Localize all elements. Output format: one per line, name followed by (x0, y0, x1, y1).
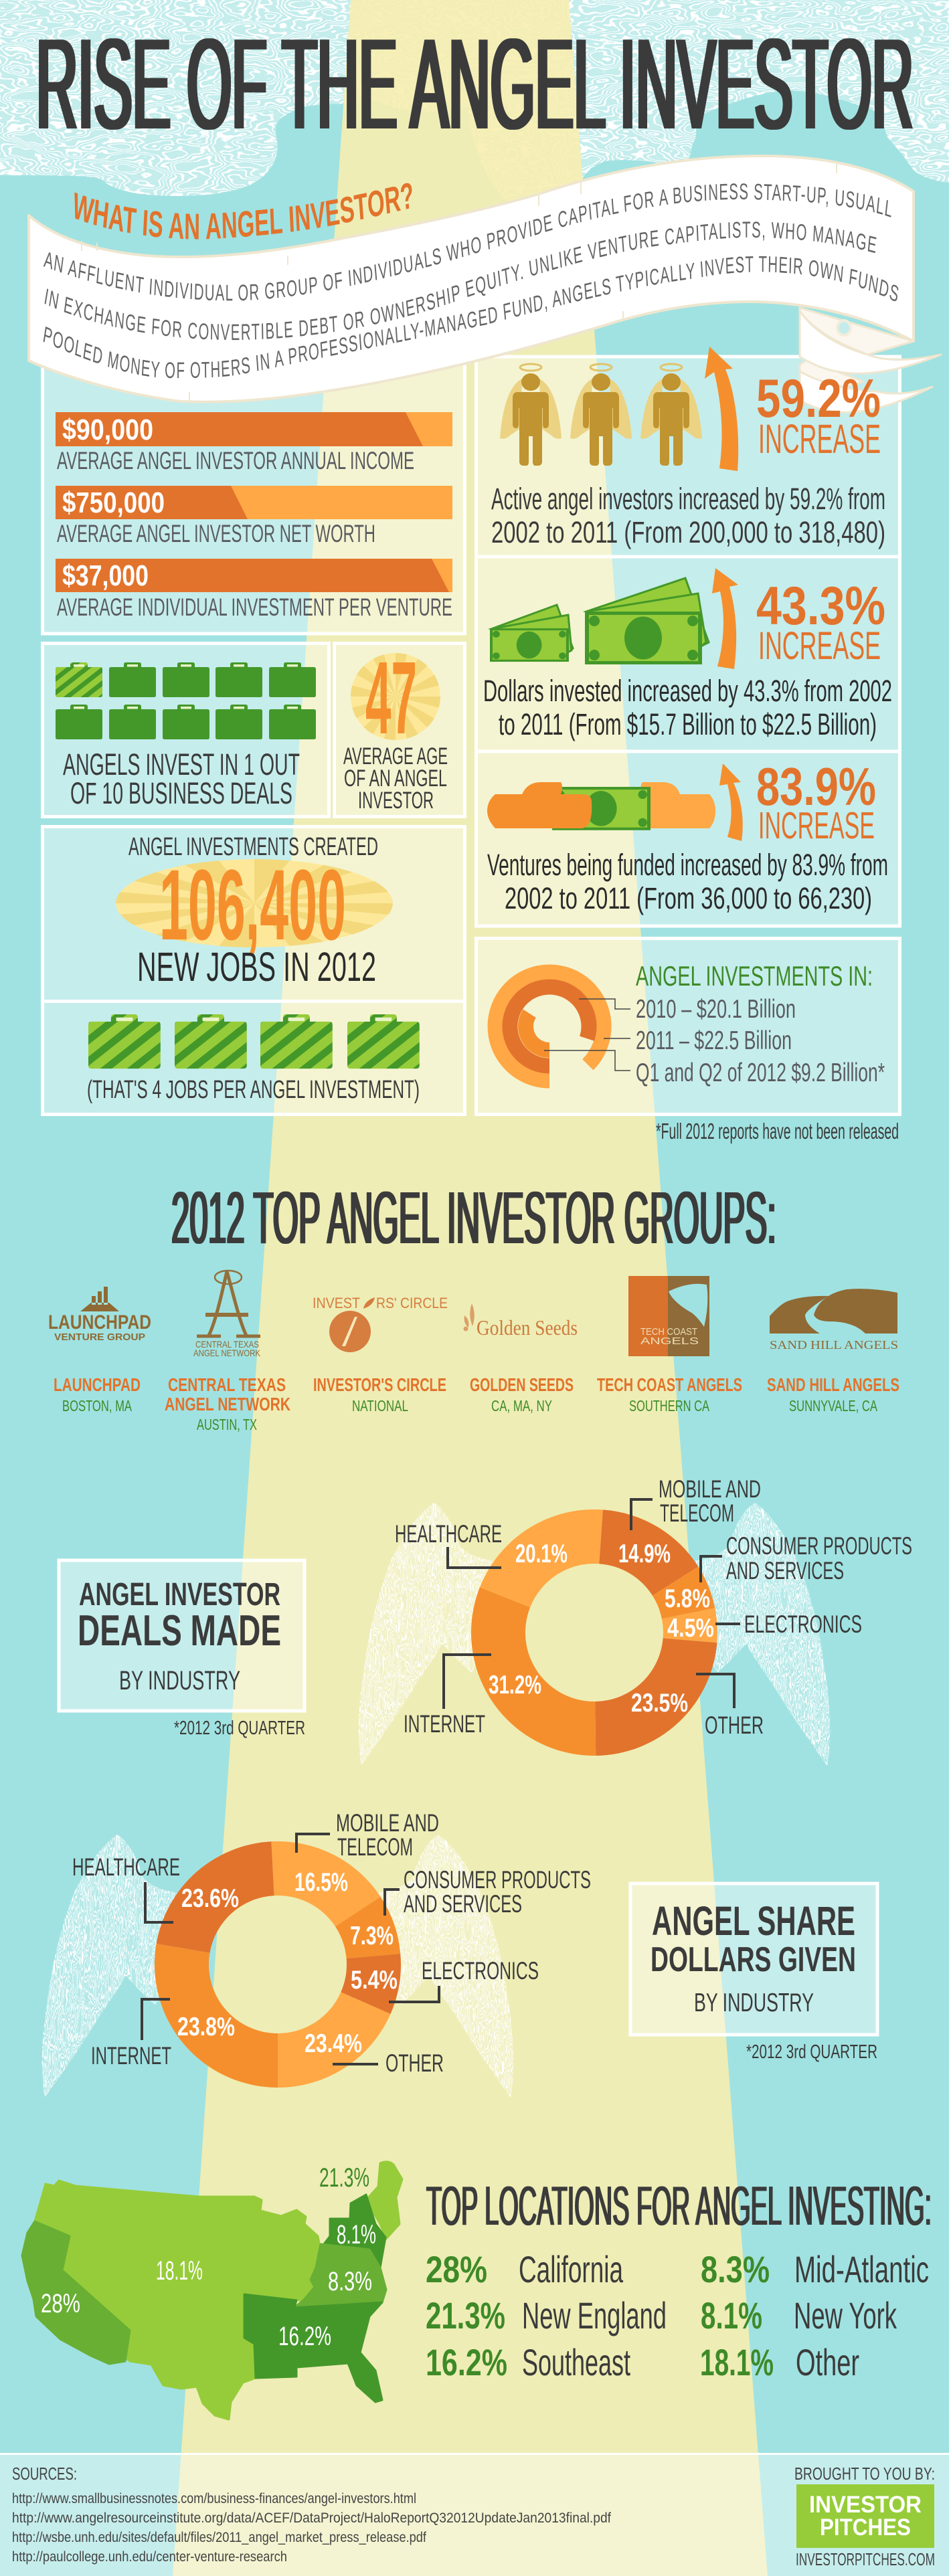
golden seeds (470, 1374, 574, 1414)
icon: hands exchanging money (487, 782, 715, 830)
ribbon banner (29, 156, 914, 402)
bar: per venture (56, 559, 452, 592)
slice values (489, 1540, 714, 1718)
arrow (712, 568, 738, 669)
icon: sunburst 47 (346, 640, 445, 755)
slice values: 23.6% (181, 1884, 239, 1913)
text: ventures funded (487, 848, 888, 915)
title text: BY INDUSTRY (119, 1666, 240, 1695)
panel: ventures funded (477, 751, 899, 926)
logo: investors' circle: INVEST (313, 1295, 360, 1311)
title text: ANGEL SHARE (652, 1898, 855, 1944)
region: california (22, 2221, 130, 2364)
golden seeds: CA, MA, NY (491, 1397, 552, 1414)
category labels donut 2: CONSUMER PRODUCTS (404, 1866, 591, 1894)
slice values: 14.9% (618, 1540, 671, 1568)
slice values: 31.2% (489, 1671, 541, 1699)
category labels donut 1: MOBILE AND (659, 1475, 761, 1503)
logo: sand hill angels: SAND HILL ANGELS (770, 1338, 898, 1352)
region: southeast (244, 2294, 382, 2402)
footer panel (0, 2453, 949, 2576)
bar: net worth: $750,000 (62, 486, 165, 519)
category labels donut 1: HEALTHCARE (395, 1520, 502, 1548)
category labels donut 2 (72, 1809, 591, 2077)
text: average age: OF AN ANGEL (344, 765, 447, 792)
tech coast: SOUTHERN CA (629, 1397, 709, 1414)
location percentages: 21.3% (426, 2294, 505, 2336)
footnote: *2012 3rd QUARTER (174, 1718, 305, 1739)
investors circle: INVESTOR'S CIRCLE (313, 1374, 446, 1395)
panel: average age (335, 640, 464, 816)
category labels donut 1: INTERNET (404, 1710, 485, 1738)
bar: per venture: $37,000 (62, 559, 149, 592)
category labels donut 2: ELECTRONICS (422, 1957, 539, 1985)
tech coast (597, 1374, 742, 1414)
sources: http://www.angelresourceinstitute.org/data/ACEF/DataProject/HaloReportQ32012UpdateJan2013final.pdf (12, 2510, 611, 2526)
leader lines (544, 999, 630, 1071)
region: new england (366, 2162, 402, 2239)
map labels: 8.1% (337, 2220, 376, 2249)
sand hill (767, 1374, 899, 1414)
category labels donut 1: ELECTRONICS (744, 1611, 862, 1638)
title text: ANGEL INVESTOR (79, 1577, 280, 1613)
icon: banknotes (490, 578, 709, 664)
region: mid-atlantic (294, 2244, 386, 2308)
leader lines donut 2 (142, 1834, 439, 2064)
sources: http://wsbe.unh.edu/sites/default/files/2011_angel_market_press_release.pdf (12, 2530, 426, 2545)
central texas: ANGEL NETWORK (165, 1394, 290, 1414)
text: active investors (491, 482, 885, 549)
leader lines donut 1 (444, 1499, 740, 1709)
map of the united states (22, 2162, 402, 2419)
donut chart: deals made (471, 1509, 717, 1756)
sunburst number: 106,400 (159, 848, 346, 961)
slice values: 5.4% (351, 1966, 398, 1995)
sources (12, 2464, 611, 2565)
map labels: 28% (41, 2289, 80, 2318)
label: net worth: AVERAGE ANGEL INVESTOR NET WORTH (57, 520, 375, 547)
text: created: ANGEL INVESTMENTS CREATED (128, 833, 378, 861)
logo: sand hill angels (770, 1289, 898, 1352)
panel: income stats (43, 361, 464, 634)
location names: Southeast (522, 2341, 630, 2383)
location percentages (426, 2248, 774, 2383)
launchpad: BOSTON, MA (62, 1397, 132, 1414)
map labels (41, 2163, 376, 2351)
sources: http://www.smallbusinessnotes.com/business-finances/angel-investors.html (12, 2491, 416, 2506)
bar: annual income (56, 412, 452, 446)
banner text (43, 183, 898, 379)
icon: three angels (500, 364, 702, 466)
logo: investor pitches: PITCHES (820, 2514, 911, 2541)
spotlight beam (173, 0, 768, 2576)
arrow (719, 763, 743, 841)
investors circle: NATIONAL (352, 1397, 408, 1414)
logo: launchpad (48, 1287, 151, 1343)
title text: BY INDUSTRY (694, 1989, 814, 2017)
wings behind donut 1 (348, 1492, 843, 1773)
group names and locations (54, 1374, 899, 1433)
tech coast: TECH COAST ANGELS (597, 1374, 742, 1395)
banner text: IN EXCHANGE FOR CONVERTIBLE DEBT OR OWNERSHIP EQUITY. UNLIKE VENTURE CAPITALISTS, WHO MANAGE (44, 221, 877, 340)
stat: 43.3% increase: 43.3% (756, 576, 885, 636)
sand hill: SUNNYVALE, CA (789, 1397, 877, 1414)
panel: deals made title (59, 1560, 305, 1711)
central texas (165, 1374, 290, 1433)
sources: SOURCES: (12, 2464, 77, 2484)
ribbon tail (800, 308, 941, 412)
stat: 59.2% increase (756, 369, 881, 462)
location names: California (519, 2248, 624, 2290)
text: average age: INVESTOR (358, 788, 434, 814)
region: other (35, 2181, 321, 2419)
slice values: 20.1% (515, 1540, 568, 1568)
category labels donut 2: INTERNET (91, 2042, 171, 2069)
slice values: 23.4% (305, 2029, 362, 2058)
panel: angel share title (630, 1883, 877, 2035)
title text (78, 1577, 281, 1695)
investors circle (313, 1374, 446, 1414)
category labels donut 1: OTHER (705, 1712, 764, 1739)
logo: tech coast angels (628, 1276, 709, 1356)
logo: tech coast angels: TECH COAST (640, 1326, 697, 1338)
category labels donut 2: AND SERVICES (404, 1890, 522, 1918)
text: dollars invested (483, 674, 892, 741)
location percentages: 8.3% (701, 2248, 770, 2290)
category labels donut 1 (395, 1475, 912, 1739)
panel: jobs created (43, 827, 464, 1001)
logo: launchpad: LAUNCHPAD (48, 1311, 151, 1333)
stat: 43.3% increase (756, 576, 885, 668)
slice values: 5.8% (665, 1584, 710, 1613)
category labels donut 2: TELECOM (337, 1833, 413, 1861)
text: deals (63, 747, 300, 810)
logo: launchpad: VENTURE GROUP (54, 1331, 145, 1343)
title text (651, 1898, 856, 2017)
map labels: 8.3% (328, 2267, 372, 2296)
text: average age: AVERAGE AGE (343, 743, 448, 769)
icon: ten briefcases (56, 662, 316, 739)
bar: net worth (56, 486, 452, 519)
text: new jobs: NEW JOBS IN 2012 (137, 944, 376, 990)
stat: 83.9% increase: 83.9% (756, 757, 876, 816)
category labels donut 1: AND SERVICES (726, 1557, 844, 1584)
slice values (177, 1868, 398, 2058)
region: new york (324, 2195, 385, 2268)
launchpad (54, 1374, 141, 1414)
stat: 59.2% increase: 59.2% (756, 369, 881, 429)
location percentages: 8.1% (701, 2294, 762, 2336)
arrow (705, 347, 738, 471)
location names (519, 2248, 929, 2383)
footnote: *2012 3rd QUARTER (746, 2041, 877, 2063)
slice values: 4.5% (667, 1614, 714, 1643)
top wings pattern (0, 0, 949, 201)
category labels donut 1: TELECOM (660, 1499, 734, 1527)
title text: DEALS MADE (78, 1606, 281, 1655)
logo: investor pitches (796, 2484, 934, 2548)
slice values: 7.3% (350, 1922, 394, 1950)
slice values: 16.5% (294, 1868, 348, 1897)
logo: central texas angel network: ANGEL NETWORK (193, 1348, 261, 1358)
map labels: 18.1% (156, 2256, 203, 2286)
title text: DOLLARS GIVEN (651, 1940, 856, 1979)
logo: central texas angel network (193, 1271, 261, 1358)
panel: angel investments by year (477, 938, 899, 1115)
label: per venture: AVERAGE INDIVIDUAL INVESTMENT PER VENTURE (57, 593, 452, 621)
logo: golden seeds: Golden Seeds (477, 1315, 578, 1340)
location percentages: 28% (426, 2248, 487, 2290)
location names: New York (794, 2294, 897, 2336)
label: annual income: AVERAGE ANGEL INVESTOR ANNUAL INCOME (57, 447, 414, 474)
launchpad: LAUNCHPAD (54, 1374, 141, 1395)
slice values: 23.8% (177, 2013, 235, 2041)
central texas: CENTRAL TEXAS (168, 1374, 286, 1395)
bar: annual income: $90,000 (62, 413, 153, 446)
map labels: 21.3% (319, 2163, 369, 2193)
location percentages: 16.2% (426, 2341, 507, 2383)
panel: 4 jobs per investment (43, 1001, 464, 1115)
logo: central texas angel network: CENTRAL TEXAS (195, 1339, 259, 1350)
text: deals: ANGELS INVEST IN 1 OUT (63, 747, 300, 781)
text: average age (343, 743, 448, 814)
donut chart: dollars given (155, 1841, 401, 2088)
sand hill: SAND HILL ANGELS (767, 1374, 899, 1395)
golden seeds: GOLDEN SEEDS (470, 1374, 574, 1395)
panel: 1 out of 10 deals (43, 644, 329, 816)
stat: 83.9% increase (756, 757, 876, 847)
slice values: 23.5% (631, 1689, 688, 1718)
location names: New England (522, 2294, 667, 2336)
category labels donut 2: OTHER (385, 2049, 444, 2077)
radial chart (495, 972, 604, 1081)
category labels donut 2: HEALTHCARE (72, 1853, 180, 1881)
location names: Other (796, 2341, 859, 2383)
logo: tech coast angels: ANGELS (640, 1336, 699, 1347)
list: yearly values (636, 995, 885, 1087)
list: yearly values: 2010 – $20.1 Billion (636, 995, 796, 1024)
heading: what is an angel investor: WHAT IS AN ANGEL INVESTOR? (74, 183, 412, 240)
icon: sunburst 47: 47 (365, 640, 417, 755)
logo: golden seeds (463, 1303, 578, 1340)
panel: active investors (477, 347, 899, 557)
wings behind donut 2 (31, 1824, 527, 2105)
sources: http://paulcollege.unh.edu/center-venture-research (12, 2549, 287, 2565)
sunburst number (102, 848, 407, 961)
logo: investor pitches: INVESTOR (809, 2492, 922, 2518)
logo: investors' circle (313, 1295, 448, 1352)
text: per investment: (THAT'S 4 JOBS PER ANGEL INVESTMENT) (87, 1076, 420, 1104)
stat: 83.9% increase: INCREASE (758, 804, 875, 847)
map labels: 16.2% (278, 2322, 331, 2351)
list: yearly values: 2011 – $22.5 Billion (636, 1026, 792, 1055)
logo: investors' circle: RS' CIRCLE (376, 1295, 448, 1311)
central texas: AUSTIN, TX (197, 1416, 257, 1433)
panel: dollars invested (477, 557, 899, 751)
category labels donut 2: MOBILE AND (336, 1809, 439, 1837)
icon: four briefcases (88, 1014, 420, 1069)
location percentages: 18.1% (700, 2341, 774, 2383)
text: deals: OF 10 BUSINESS DEALS (70, 776, 292, 810)
